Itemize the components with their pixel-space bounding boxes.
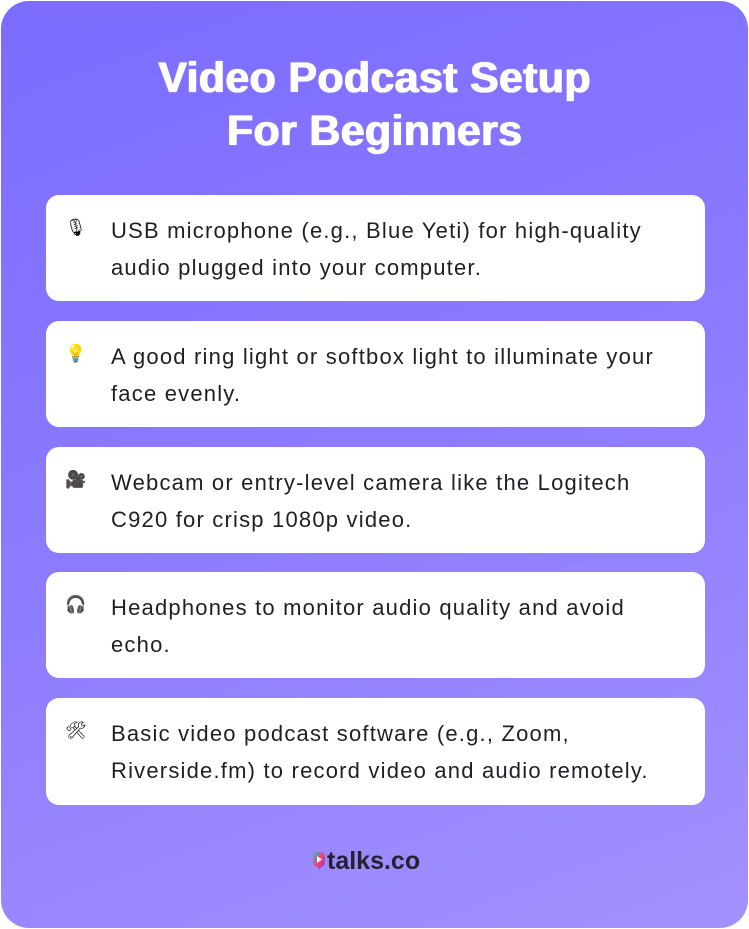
- text: camera: C920 for crisp 1080p video.: [111, 507, 412, 532]
- card: camera: [46, 447, 705, 553]
- icon: tools: 🛠: [65, 721, 87, 741]
- card: headphones: [46, 572, 705, 678]
- text: microphone: [111, 218, 642, 280]
- logo: talks.co: [327, 847, 420, 875]
- text: headphones: Headphones to monitor audio quality and avoid: [111, 595, 625, 620]
- icon: microphone: 🎙: [65, 218, 87, 238]
- icon: camera: 🎥: [65, 470, 86, 490]
- title: [158, 54, 591, 155]
- title: Video Podcast Setup: [158, 54, 591, 102]
- text: software: Basic video podcast software (e.g., Zoom,: [111, 721, 570, 746]
- text: software: Riverside.fm) to record video and audio remotely.: [111, 758, 649, 783]
- text: headphones: [111, 595, 625, 657]
- text: light: [111, 344, 654, 406]
- text: microphone: audio plugged into your computer.: [111, 255, 482, 280]
- text: light: A good ring light or softbox light to illuminate your: [111, 344, 654, 369]
- text: software: [111, 721, 649, 783]
- text: microphone: USB microphone (e.g., Blue Yeti) for high-quality: [111, 218, 642, 243]
- text: headphones: echo.: [111, 632, 171, 657]
- text: light: face evenly.: [111, 381, 241, 406]
- icon: light bulb: 💡: [65, 344, 86, 364]
- card: software: [46, 698, 705, 805]
- title: For Beginners: [227, 107, 522, 155]
- icon: headphones: 🎧: [65, 595, 86, 615]
- card: light: [46, 321, 705, 427]
- card: microphone: [46, 195, 705, 301]
- text: camera: [111, 470, 630, 532]
- text: camera: Webcam or entry-level camera like the Logitech: [111, 470, 630, 495]
